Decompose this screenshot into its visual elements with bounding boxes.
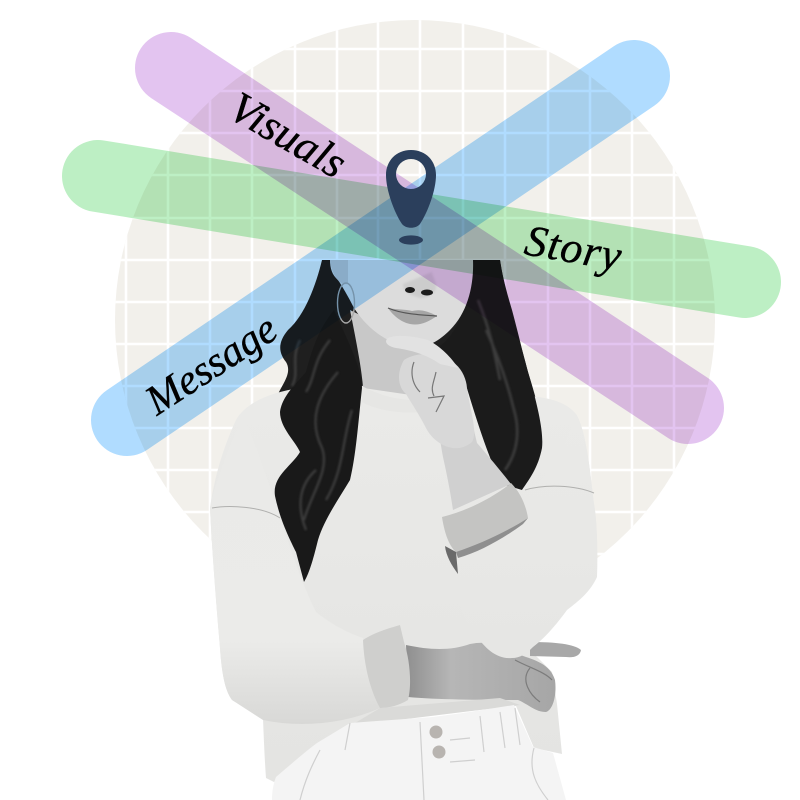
index finger xyxy=(386,340,458,368)
earring hoop xyxy=(338,283,354,323)
sweater body xyxy=(210,384,597,782)
sweater collar xyxy=(363,386,366,388)
button xyxy=(432,746,446,758)
jeans xyxy=(272,705,566,800)
lips xyxy=(388,308,437,325)
hair back xyxy=(278,260,536,397)
bar: purple xyxy=(171,68,688,408)
label: Message: Message xyxy=(137,306,286,425)
icon: location pin xyxy=(386,150,436,245)
hem of sweater xyxy=(356,698,519,722)
nose xyxy=(403,272,436,298)
wrist xyxy=(440,432,510,510)
neck xyxy=(350,310,422,394)
ear xyxy=(330,260,348,284)
thinking hand and wrist xyxy=(386,336,511,510)
hair strands highlights xyxy=(292,340,352,530)
lower sleeve left xyxy=(223,676,380,724)
woman photo xyxy=(210,260,597,800)
upper arm sleeve xyxy=(482,490,598,658)
pointing finger xyxy=(530,642,581,657)
background grid circle xyxy=(115,20,715,558)
fist xyxy=(399,354,474,448)
button xyxy=(430,726,442,738)
rolled cuff lower xyxy=(363,625,410,708)
bar: blue xyxy=(127,76,634,420)
right-side hair front xyxy=(467,260,542,490)
hair front left over sweater xyxy=(274,386,362,582)
bar: green xyxy=(98,176,745,282)
label: Visuals: Visuals xyxy=(221,82,355,188)
lower forearm and hand xyxy=(406,643,556,712)
neck and face xyxy=(330,260,542,490)
label: Story: Story xyxy=(521,216,626,281)
face xyxy=(330,260,473,348)
rolled cuff upper xyxy=(442,483,528,552)
colored bars xyxy=(98,68,745,420)
